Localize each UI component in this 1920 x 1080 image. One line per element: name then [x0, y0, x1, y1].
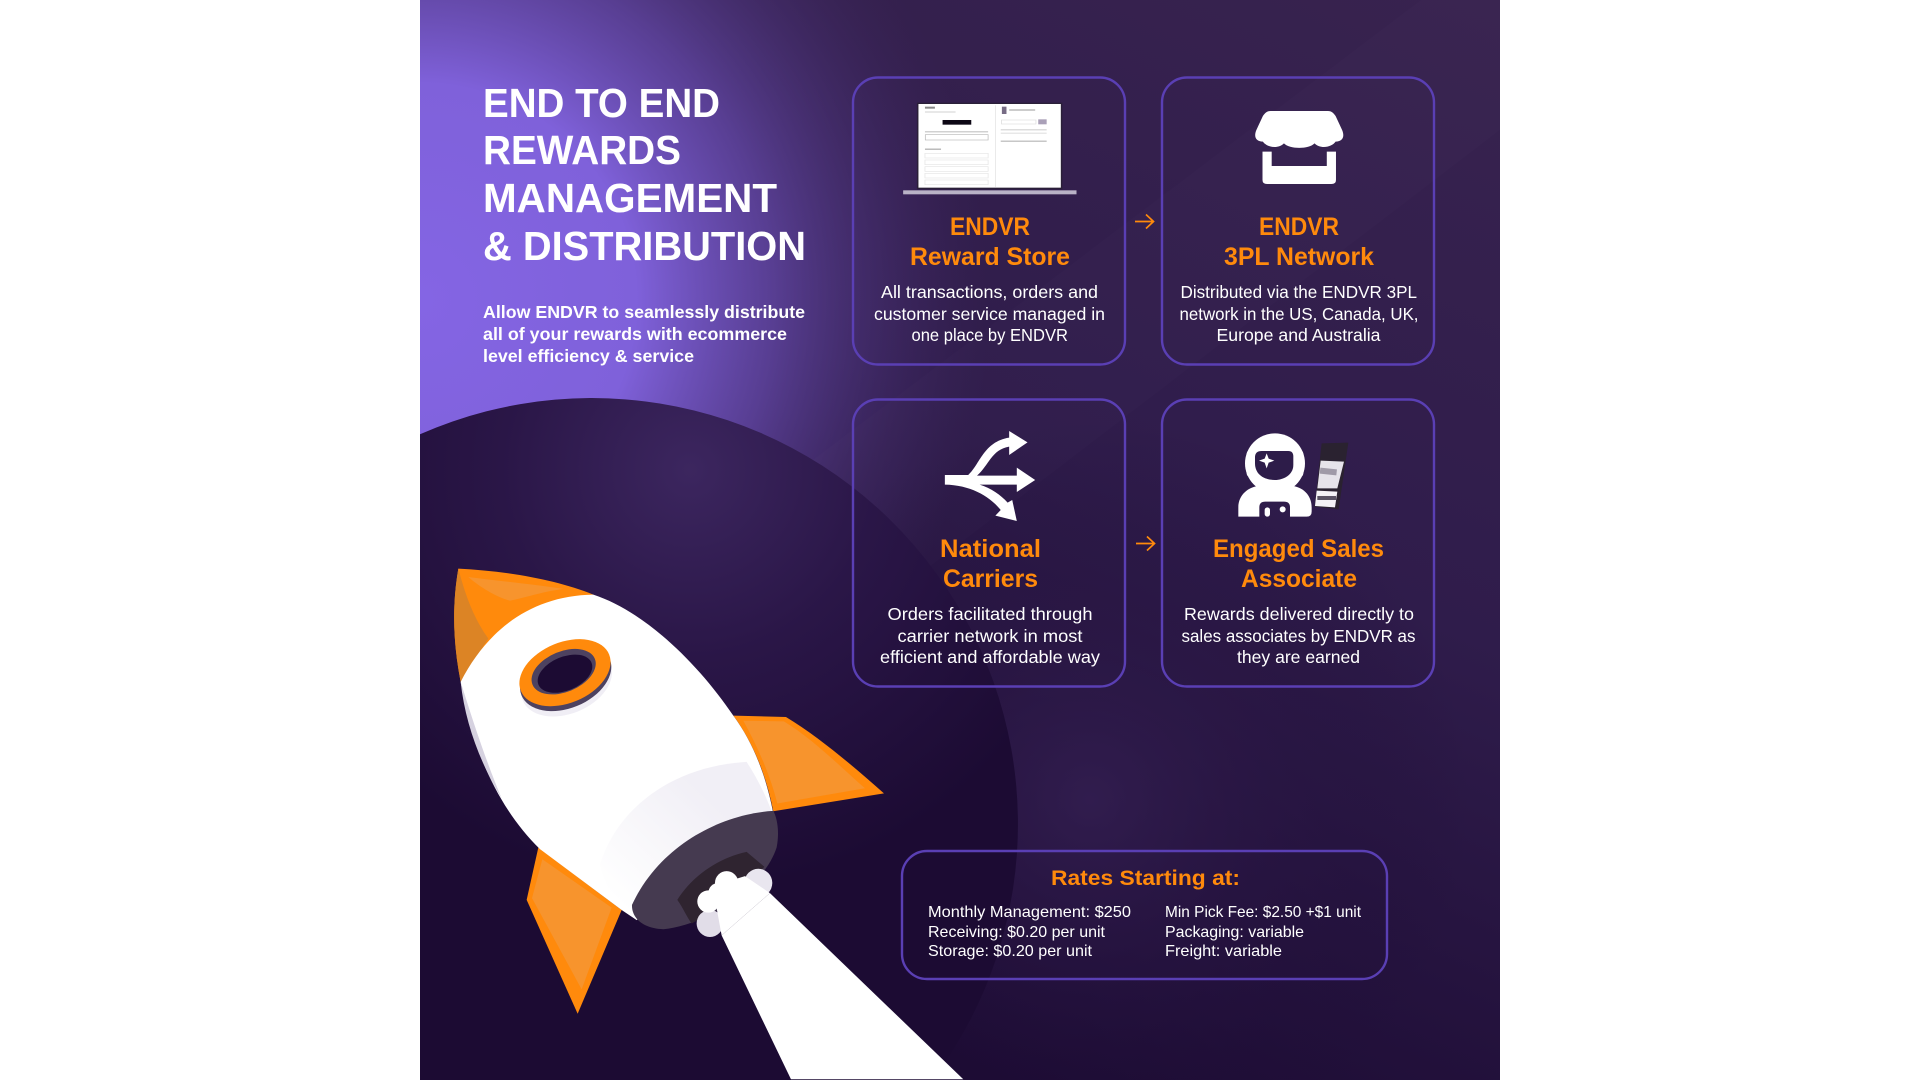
heading: Reward Store: [910, 243, 1070, 271]
porthole: [510, 626, 622, 729]
description: Distributed via the ENDVR 3PL: [1180, 282, 1417, 302]
body side shading: [461, 682, 502, 798]
engine nozzle: [632, 811, 778, 929]
description: [880, 604, 1100, 667]
description: one place by ENDVR: [912, 325, 1068, 345]
heading: National: [940, 535, 1041, 563]
subtitle: level efficiency & service: [483, 346, 694, 366]
rates right column: Freight: variable: [1165, 943, 1282, 960]
heading: [1224, 213, 1374, 271]
description: [1180, 282, 1418, 345]
description: All transactions, orders and: [881, 282, 1098, 302]
description: sales associates by ENDVR as: [1182, 626, 1416, 646]
heading: [940, 535, 1041, 593]
heading: 3PL Network: [1224, 243, 1374, 271]
heading: ENDVR: [950, 213, 1030, 241]
rates right column: [1165, 904, 1362, 960]
background: [420, 0, 1500, 1080]
title: MANAGEMENT: [483, 175, 777, 221]
title: [483, 80, 806, 269]
description: Rewards delivered directly to: [1184, 604, 1414, 624]
heading: [910, 213, 1070, 271]
description: network in the US, Canada, UK,: [1180, 304, 1418, 324]
rocket illustration: [454, 569, 963, 1079]
rates left column: [928, 904, 1131, 960]
rates left column: Monthly Management: $250: [928, 904, 1131, 921]
description: [1182, 604, 1416, 667]
rates right column: Min Pick Fee: $2.50 +$1 unit: [1165, 904, 1362, 921]
rates left column: Storage: $0.20 per unit: [928, 943, 1093, 960]
icon: storefront: [1255, 111, 1343, 184]
heading: Engaged Sales: [1213, 535, 1384, 563]
heading: Rates Starting at:: [1051, 867, 1240, 890]
heading: Associate: [1241, 565, 1357, 593]
description: they are earned: [1237, 647, 1360, 667]
icon: laptop with checkout screen: [903, 103, 1077, 194]
panel: reward store: [853, 78, 1125, 364]
description: carrier network in most: [898, 626, 1083, 646]
description: customer service managed in: [874, 304, 1105, 324]
panel: 3PL network: [1162, 78, 1434, 364]
description: Europe and Australia: [1216, 325, 1381, 345]
heading: Carriers: [943, 565, 1038, 593]
title: & DISTRIBUTION: [483, 223, 806, 269]
subtitle: Allow ENDVR to seamlessly distribute: [483, 302, 805, 322]
description: [874, 282, 1105, 345]
panel: rates: [902, 851, 1387, 979]
heading: [1213, 535, 1384, 593]
left fin: [527, 847, 622, 1014]
rocket body: [461, 595, 774, 920]
right fin: [733, 716, 884, 811]
heading: ENDVR: [1259, 213, 1339, 241]
icon: splitting arrows: [945, 431, 1035, 521]
description: efficient and affordable way: [880, 647, 1100, 667]
description: Orders facilitated through: [888, 604, 1092, 624]
exhaust beam: [722, 893, 963, 1079]
rates left column: Receiving: $0.20 per unit: [928, 924, 1106, 941]
rates right column: Packaging: variable: [1165, 924, 1304, 941]
rocket nose: [454, 569, 593, 682]
arrow: carriers to associate: [1136, 536, 1154, 550]
subtitle: [483, 302, 805, 366]
icon: astronaut with phone: [1238, 433, 1348, 517]
panel: national carriers: [853, 400, 1125, 686]
title: END TO END: [483, 80, 720, 126]
exhaust puffs: [697, 869, 772, 937]
title: REWARDS: [483, 127, 681, 173]
arrow: store to network: [1135, 214, 1154, 228]
panel: engaged sales associate: [1162, 400, 1434, 686]
body lower band: [600, 762, 774, 920]
subtitle: all of your rewards with ecommerce: [483, 324, 787, 344]
